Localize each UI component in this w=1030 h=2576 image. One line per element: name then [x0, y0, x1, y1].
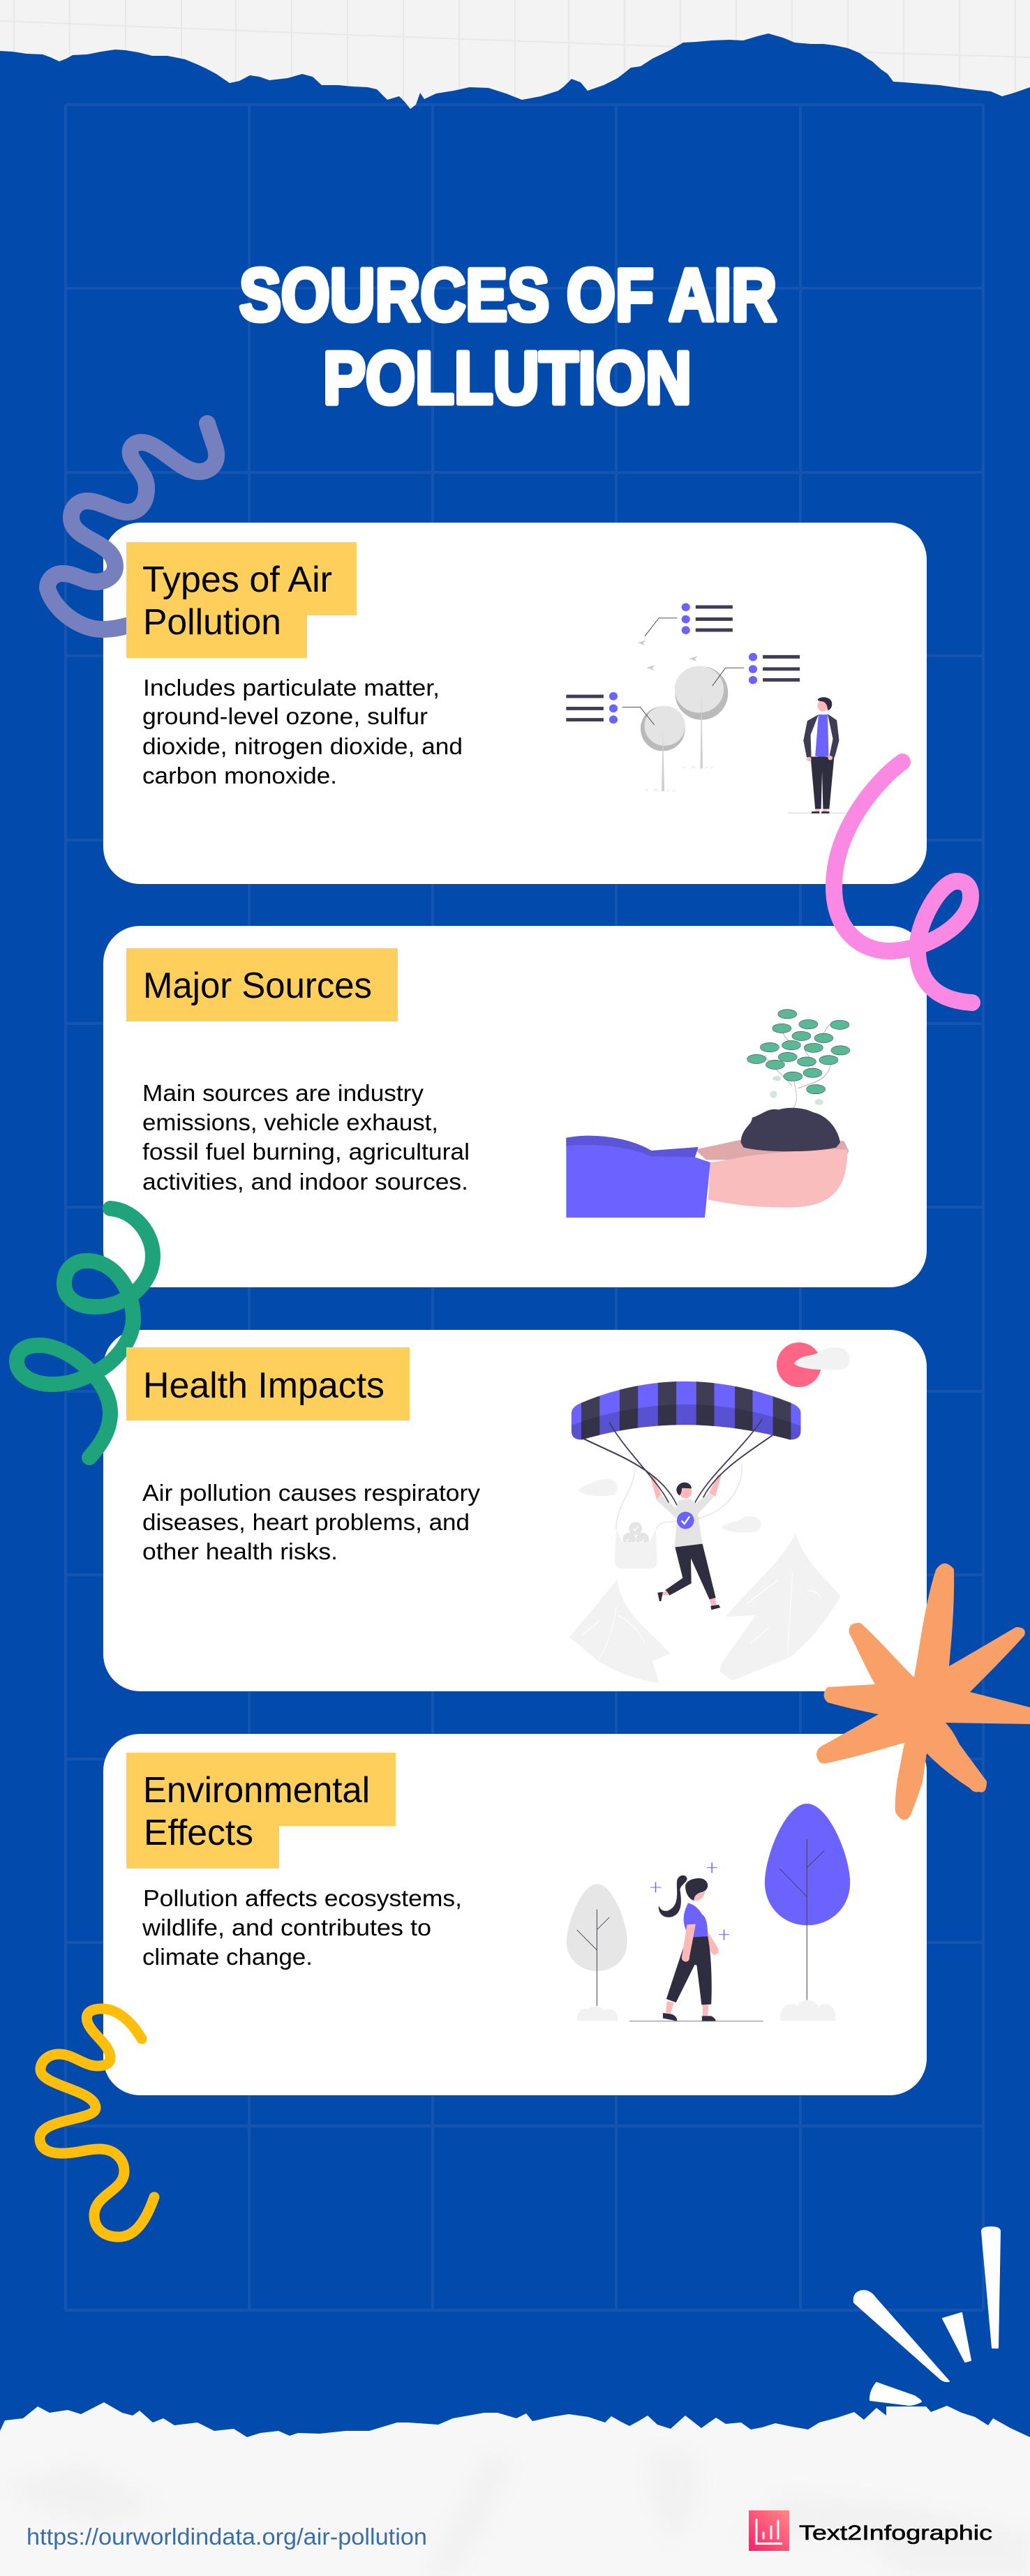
text: environmental effects: climate change.: [142, 1944, 313, 1970]
logo: [749, 2510, 992, 2551]
text: major sources: activities, and indoor sources.: [142, 1169, 468, 1195]
tree: purple: [765, 1804, 850, 2021]
text: environmental effects: Pollution affects ecosystems,: [143, 1885, 462, 1911]
heading: major sources: [126, 948, 398, 1021]
scribble: pink: [834, 762, 972, 1003]
shape: white spark lines: [854, 2227, 1000, 2405]
text: types of air pollution: dioxide, nitrogen dioxide, and: [142, 733, 463, 759]
panel: major sources: [103, 926, 927, 1287]
title: [239, 254, 777, 419]
scribble: gold: [40, 2009, 154, 2237]
parachutist figure: [650, 1474, 722, 1610]
tree: large: [675, 666, 728, 768]
title: SOURCES OF AIR: [239, 254, 777, 336]
title: POLLUTION: [323, 337, 692, 419]
text: health impacts: [142, 1480, 481, 1564]
heading: health impacts: [126, 1347, 410, 1421]
text: types of air pollution: Includes particulate matter,: [143, 675, 440, 701]
icon: list left: [566, 692, 618, 724]
text: major sources: Main sources are industry: [142, 1080, 424, 1106]
sun and cloud: [777, 1342, 850, 1387]
text: types of air pollution: ground-level ozone, sulfur: [142, 703, 428, 729]
parachute: [565, 1377, 805, 1505]
ground: [629, 2020, 763, 2023]
figure: woman: [650, 1862, 729, 2021]
person and gear: [615, 1464, 761, 1610]
arm and hand: [566, 1109, 849, 1218]
tree: small: [641, 706, 685, 791]
text: major sources: emissions, vehicle exhaust,: [142, 1109, 438, 1135]
icon: chart logo: [749, 2510, 789, 2551]
text: health impacts: diseases, heart problems, and: [142, 1509, 470, 1535]
heading: environmental effects: Environmental: [143, 1770, 370, 1811]
mountains: [569, 1479, 841, 1683]
icon: list top: [682, 603, 733, 634]
illustration: man with data trees: [566, 603, 847, 814]
text: major sources: fossil fuel burning, agricultural: [142, 1139, 470, 1165]
basket: [615, 1464, 742, 1568]
illustration: parachutist: [565, 1342, 850, 1683]
heading: types of air pollution: [126, 542, 357, 658]
scribble: periwinkle: [47, 424, 216, 629]
illustration: woman and trees: [567, 1804, 850, 2021]
panel: health impacts: [103, 1330, 927, 1691]
torn paper: bottom: [0, 2402, 1030, 2576]
tree: grey: [567, 1884, 627, 2021]
heading: environmental effects: Effects: [144, 1813, 253, 1853]
text: types of air pollution: [142, 675, 463, 788]
text: health impacts: Air pollution causes respiratory: [142, 1480, 481, 1506]
text: environmental effects: wildlife, and contributes to: [142, 1915, 431, 1940]
cloud: left: [578, 1479, 618, 1496]
heading: types of air pollution: Types of Air: [142, 560, 332, 600]
text: health impacts: other health risks.: [142, 1538, 338, 1564]
panel: types of air pollution: [103, 523, 927, 884]
heading: types of air pollution: Pollution: [143, 602, 281, 643]
shape: orange star: [816, 1564, 1030, 1820]
icon: list right: [749, 653, 800, 684]
heading: health impacts: Health Impacts: [143, 1365, 385, 1406]
cloud: right: [722, 1516, 761, 1533]
text: environmental effects: [142, 1885, 462, 1970]
heading: environmental effects: [126, 1753, 396, 1869]
source url: https://ourworldindata.org/air-pollution: [27, 2524, 427, 2549]
figure: man: [788, 697, 847, 814]
illustration: hand holding plant: [566, 1010, 850, 1218]
panel: environmental effects: [103, 1734, 927, 2095]
text: types of air pollution: carbon monoxide.: [142, 763, 337, 788]
scribble: green: [17, 1208, 153, 1458]
text: major sources: [142, 1080, 470, 1195]
logo: Text2Infographic: [799, 2522, 992, 2545]
torn paper: top: [0, 0, 1030, 112]
heading: major sources: Major Sources: [143, 966, 372, 1006]
plant leaves: [747, 1010, 850, 1109]
